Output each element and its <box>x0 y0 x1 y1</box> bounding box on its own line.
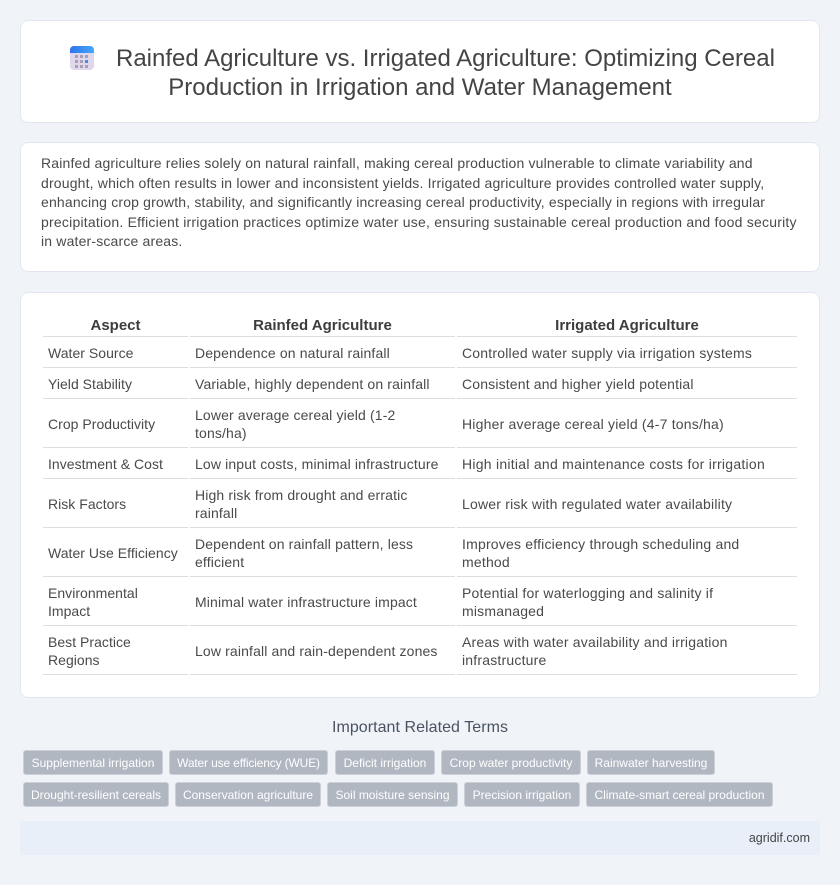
row: investment and cost: Low input costs, minimal infrastructure <box>195 456 439 472</box>
row: crop productivity: tons/ha) <box>195 424 247 440</box>
tag: Water use efficiency (WUE) <box>177 756 320 770</box>
row: yield stability: Variable, highly dependent on rainfall <box>195 376 430 392</box>
row: investment and cost <box>43 456 797 479</box>
row: water use efficiency <box>43 536 797 577</box>
comparison table panel <box>20 292 820 698</box>
tag: Precision irrigation <box>473 788 571 802</box>
row: best practice regions: Low rainfall and rain-dependent zones <box>195 642 438 658</box>
tag: Climate-smart cereal production <box>594 788 765 802</box>
related terms heading: Important Related Terms <box>332 719 508 736</box>
row: environmental impact <box>43 584 797 626</box>
footer bar <box>20 821 820 855</box>
header card <box>20 20 820 123</box>
tag: Rainwater harvesting <box>595 756 707 770</box>
intro paragraph <box>41 155 797 249</box>
table header: Aspect <box>90 317 141 334</box>
tag <box>464 782 580 807</box>
row: water use efficiency: efficient <box>195 554 244 570</box>
tag <box>23 782 169 807</box>
intro text panel <box>20 142 820 272</box>
title <box>116 45 775 101</box>
row: investment and cost: Investment & Cost <box>48 456 163 472</box>
row: best practice regions: Regions <box>48 652 100 668</box>
row: crop productivity <box>43 406 797 448</box>
intro paragraph: in water-scarce areas. <box>41 233 182 249</box>
tag: Drought-resilient cereals <box>31 788 161 802</box>
tag: Conservation agriculture <box>183 788 313 802</box>
row: water source: Water Source <box>48 344 133 360</box>
row: water use efficiency: Dependent on rainfall pattern, less <box>195 536 413 552</box>
row: environmental impact: Potential for waterlogging and salinity if <box>462 584 713 600</box>
intro paragraph: Rainfed agriculture relies solely on natural rainfall, making cereal production vulnerable to climate variability and <box>41 155 753 171</box>
row: investment and cost: High initial and maintenance costs for irrigation <box>462 456 765 472</box>
row: yield stability: Yield Stability <box>48 376 132 392</box>
intro paragraph: enhancing crop growth, stability, and significantly increasing cereal productivity, especially in regions with irregular <box>41 194 765 210</box>
title: Rainfed Agriculture vs. Irrigated Agriculture: Optimizing Cereal <box>116 45 775 72</box>
intro paragraph: drought, which often results in lower and inconsistent yields. Irrigated agriculture provides controlled water supply, <box>41 175 764 191</box>
tag <box>327 782 458 807</box>
row: best practice regions: Best Practice <box>48 634 131 650</box>
row: crop productivity: Lower average cereal yield (1-2 <box>195 406 395 422</box>
row: yield stability: Consistent and higher yield potential <box>462 376 694 392</box>
row: risk factors: Risk Factors <box>48 496 126 512</box>
row: crop productivity: Higher average cereal yield (4-7 tons/ha) <box>462 416 724 432</box>
tag: Deficit irrigation <box>344 756 426 770</box>
footer site name: agridif.com <box>749 831 810 845</box>
related terms tags <box>23 750 773 807</box>
row: best practice regions: infrastructure <box>462 652 546 668</box>
row: environmental impact: Impact <box>48 602 90 618</box>
tag <box>175 782 321 807</box>
icon: calendar <box>70 46 94 70</box>
tag <box>335 750 435 775</box>
row: best practice regions <box>43 634 797 675</box>
title: Production in Irrigation and Water Management <box>168 74 672 101</box>
row: risk factors <box>43 486 797 528</box>
table header <box>43 317 797 337</box>
row: crop productivity: Crop Productivity <box>48 416 155 432</box>
row: water source <box>43 344 797 368</box>
tag <box>586 782 773 807</box>
tag: Crop water productivity <box>450 756 572 770</box>
row: water use efficiency: Improves efficiency through scheduling and <box>462 536 739 552</box>
row: risk factors: Lower risk with regulated water availability <box>462 496 732 512</box>
tag: Soil moisture sensing <box>335 788 450 802</box>
row: water source: Controlled water supply via irrigation systems <box>462 344 752 360</box>
row: water use efficiency: method <box>462 554 510 570</box>
row: water source: Dependence on natural rainfall <box>195 344 390 360</box>
row: risk factors: High risk from drought and erratic <box>195 486 408 502</box>
table header: Rainfed Agriculture <box>253 317 392 334</box>
comparison table <box>43 317 797 675</box>
row: risk factors: rainfall <box>195 504 237 520</box>
row: yield stability <box>43 376 797 399</box>
tag <box>23 750 163 775</box>
table header: Irrigated Agriculture <box>555 317 699 334</box>
tag <box>587 750 715 775</box>
tag <box>169 750 328 775</box>
intro paragraph: precipitation. Efficient irrigation practices optimize water use, ensuring sustainable cereal production and food security <box>41 214 797 230</box>
tag <box>441 750 581 775</box>
row: best practice regions: Areas with water availability and irrigation <box>462 634 728 650</box>
row: environmental impact: mismanaged <box>462 602 544 618</box>
row: environmental impact: Minimal water infrastructure impact <box>195 594 417 610</box>
tag: Supplemental irrigation <box>32 756 154 770</box>
row: environmental impact: Environmental <box>48 584 138 600</box>
row: water use efficiency: Water Use Efficiency <box>48 544 178 560</box>
